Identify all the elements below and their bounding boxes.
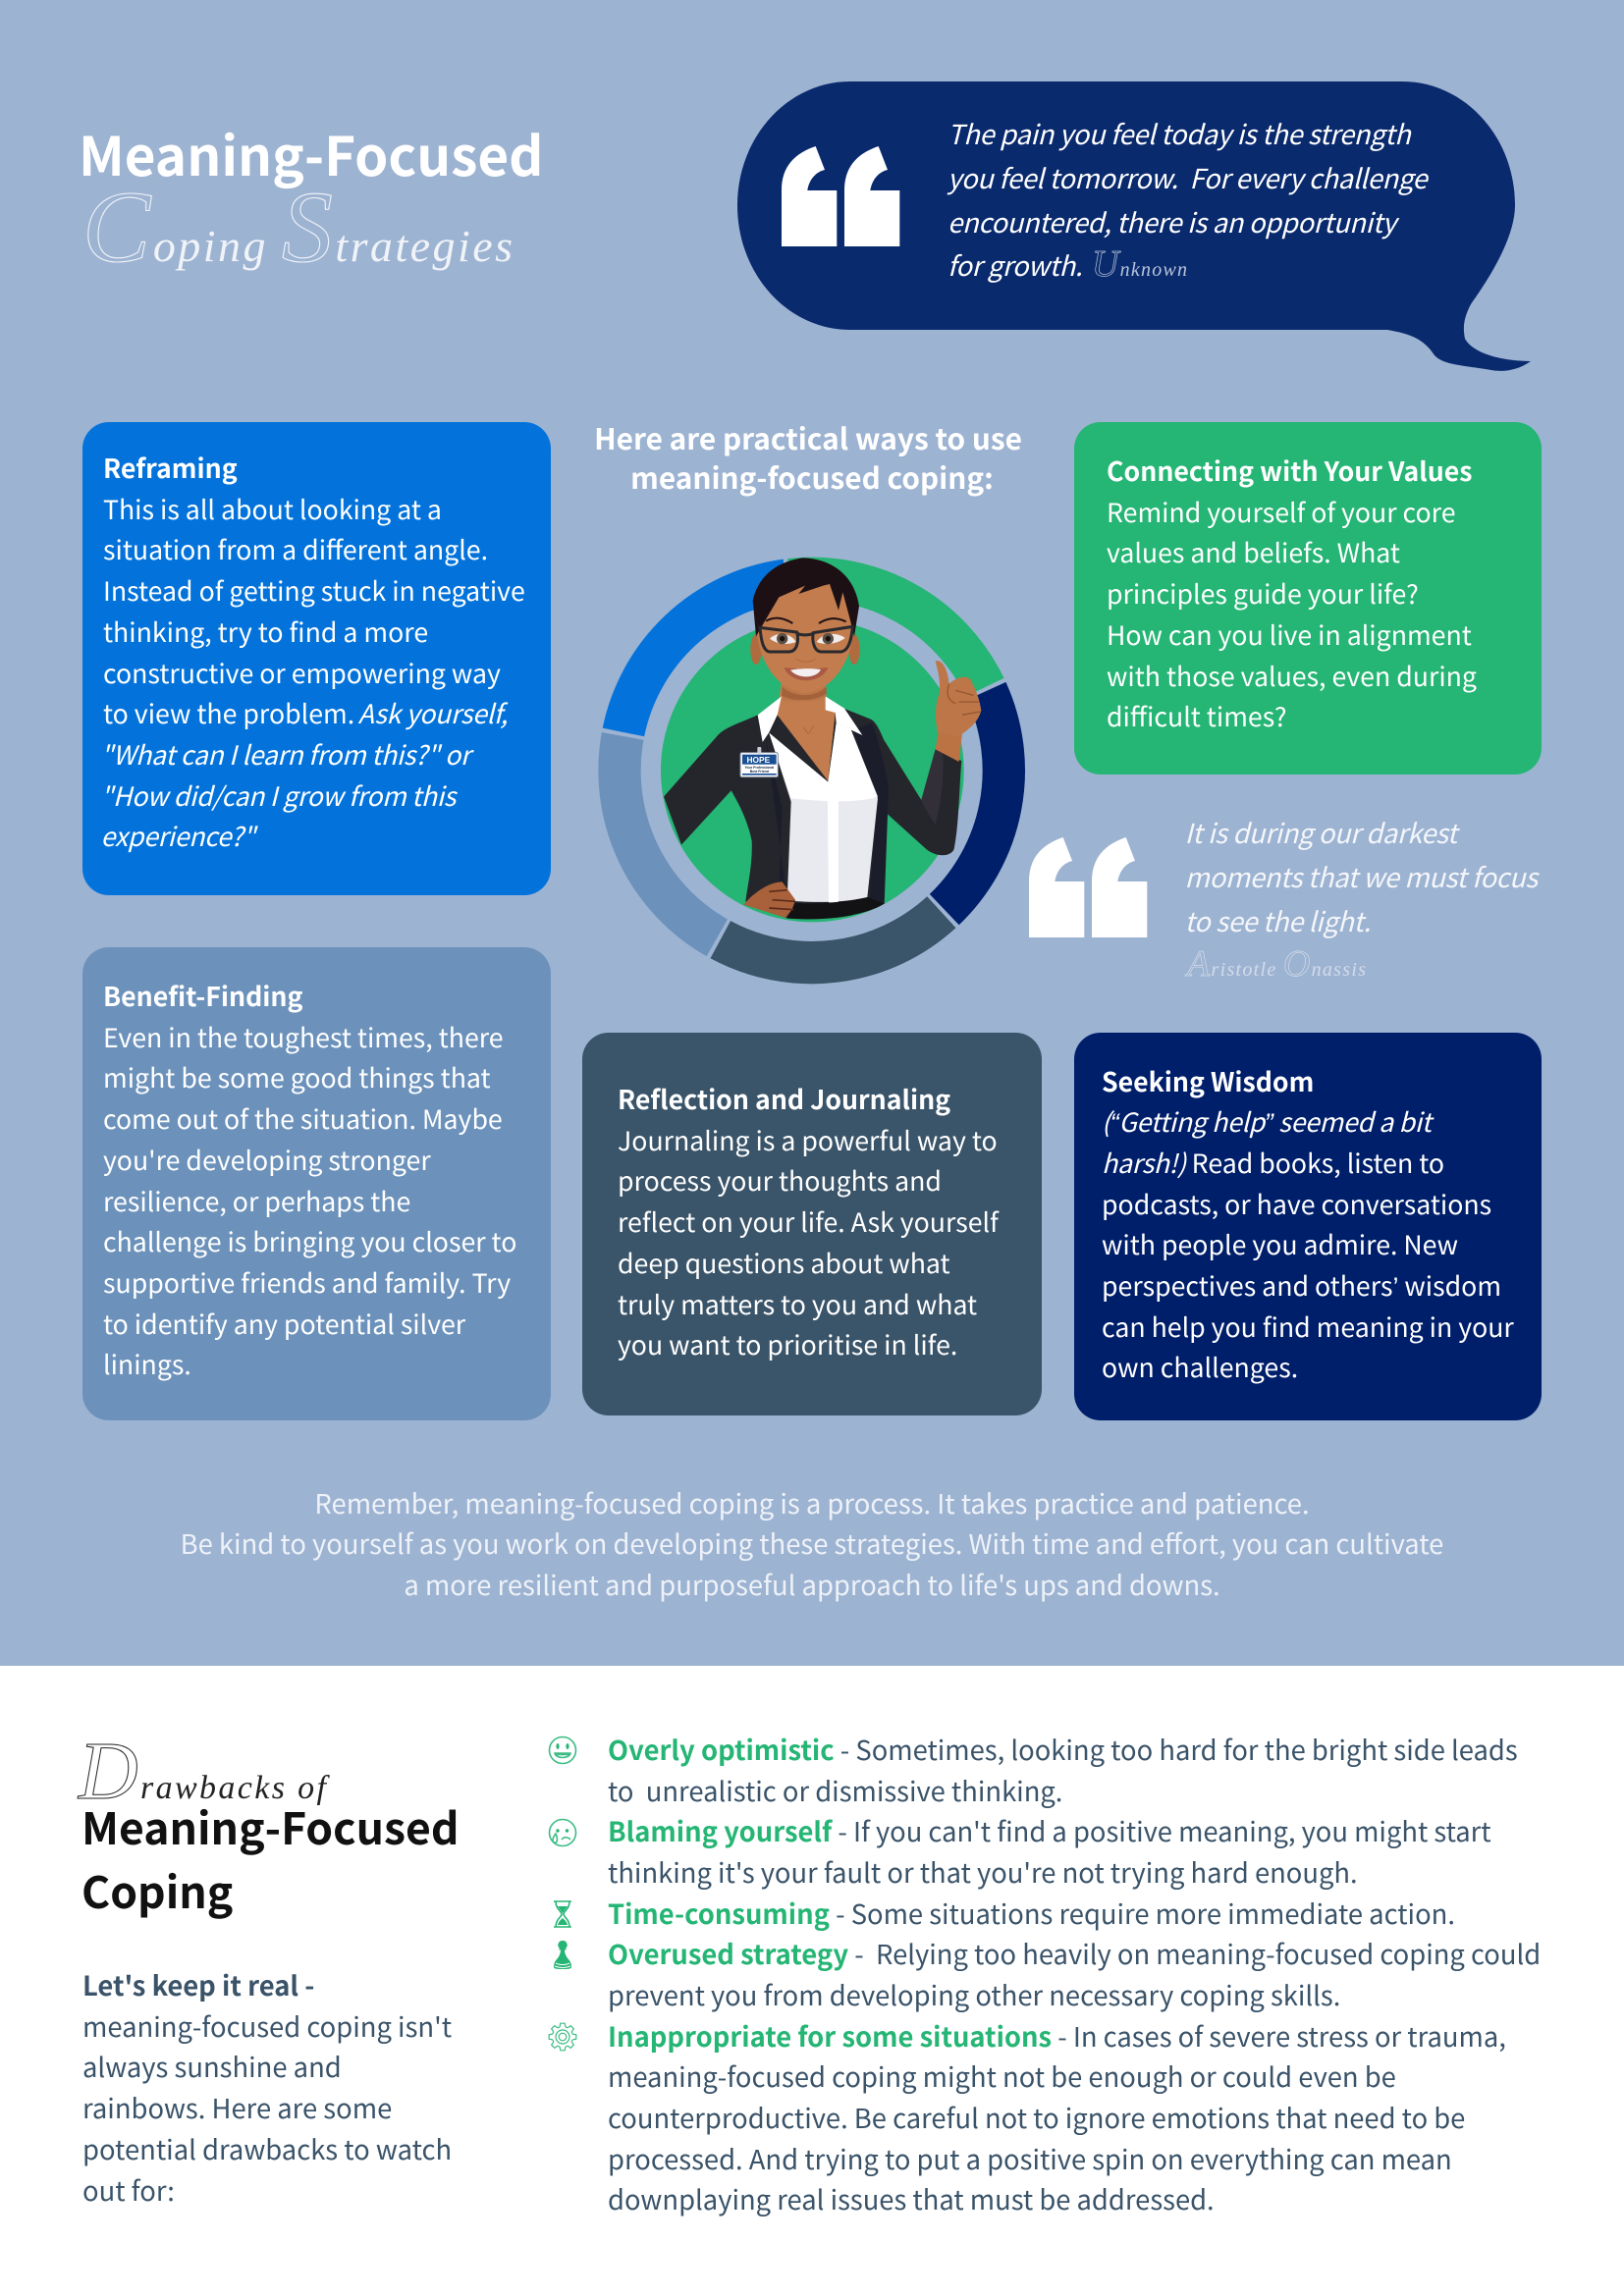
closing paragraph: a more resilient and purposeful approach to life's ups and downs. bbox=[404, 1564, 1220, 1603]
title line: Meaning-Focused: Meaning-Focused bbox=[79, 113, 543, 191]
quote text bbox=[947, 113, 1429, 284]
icon: crying face bbox=[548, 1818, 577, 1847]
benefit-finding text: supportive friends and family. Try bbox=[103, 1262, 511, 1301]
connecting text: Connecting with Your Values bbox=[1107, 451, 1472, 489]
benefit-finding text: might be some good things that bbox=[103, 1057, 491, 1095]
hair bbox=[753, 558, 859, 636]
icon: gear bbox=[548, 2022, 577, 2052]
reframing text: "How did/can I grow from this bbox=[100, 775, 456, 814]
character illustration bbox=[664, 558, 981, 919]
icon: hourglass bbox=[554, 1900, 571, 1928]
reframing text: thinking, try to find a more bbox=[103, 612, 428, 650]
attribution: Aristotle Onassis: Aristotle Onassis bbox=[1184, 943, 1366, 985]
drawbacks list: downplaying real issues that must be addressed. bbox=[608, 2178, 1215, 2217]
donut ring bbox=[540, 500, 1083, 1041]
inner green circle bbox=[661, 619, 964, 922]
intro text: rainbows. Here are some bbox=[82, 2087, 392, 2126]
drawbacks list: processed. And trying to put a positive spin on everything can mean bbox=[608, 2138, 1452, 2177]
connecting text: principles guide your life? bbox=[1107, 573, 1419, 612]
jacket bbox=[664, 709, 961, 919]
seeking wisdom text bbox=[1102, 1060, 1514, 1385]
seeking wisdom text: podcasts, or have conversations bbox=[1102, 1184, 1491, 1222]
panel: benefit-finding bbox=[82, 947, 551, 1420]
bubble shape bbox=[737, 81, 1531, 371]
intro text: always sunshine and bbox=[82, 2046, 342, 2085]
quote text: you feel tomorrow. For every challenge bbox=[947, 157, 1427, 196]
benefit-finding text: to identify any potential silver bbox=[103, 1304, 465, 1342]
connecting text: with those values, even during bbox=[1107, 656, 1477, 694]
connecting text: How can you live in alignment bbox=[1107, 614, 1472, 653]
reframing text bbox=[100, 448, 525, 854]
drawbacks list: Overused strategy - Relying too heavily on meaning-focused coping could bbox=[608, 1933, 1541, 1972]
lapel bbox=[852, 723, 889, 906]
benefit-finding text: linings. bbox=[103, 1344, 191, 1382]
seeking wisdom text: harsh!) Read books, listen to bbox=[1102, 1143, 1444, 1181]
reflection text: deep questions about what bbox=[618, 1243, 950, 1281]
script: Drawbacks of: Drawbacks of bbox=[78, 1726, 331, 1817]
nose bbox=[795, 658, 817, 662]
reflection text bbox=[618, 1079, 1000, 1362]
reframing text: to view the problem. Ask yourself, bbox=[103, 693, 508, 731]
raised forearm and hand bbox=[936, 726, 962, 762]
title script: Coping Strategies: Coping Strategies bbox=[82, 171, 513, 284]
title bbox=[79, 113, 543, 284]
benefit-finding text: Benefit-Finding bbox=[103, 976, 302, 1014]
reframing text: constructive or empowering way bbox=[103, 653, 501, 691]
reflection text: process your thoughts and bbox=[618, 1160, 942, 1199]
intro text: potential drawbacks to watch bbox=[82, 2128, 452, 2167]
name badge bbox=[740, 747, 778, 777]
icon: smile bbox=[548, 1735, 577, 1765]
seeking wisdom text: with people you admire. New bbox=[1102, 1224, 1458, 1262]
central heading bbox=[594, 414, 1022, 497]
connecting text bbox=[1107, 451, 1477, 734]
drawbacks list: Inappropriate for some situations - In cases of severe stress or trauma, bbox=[608, 2015, 1506, 2055]
heading: Meaning-Focused Coping bbox=[81, 1792, 459, 1920]
reflection text: Journaling is a powerful way to bbox=[618, 1120, 998, 1158]
reframing text: Reframing bbox=[103, 448, 238, 486]
blue background section bbox=[0, 0, 1624, 1666]
head bbox=[750, 558, 860, 702]
drawbacks list bbox=[608, 1729, 1541, 2217]
drawbacks heading bbox=[77, 1726, 459, 1920]
drawbacks list: Time-consuming - Some situations require more immediate action. bbox=[608, 1893, 1455, 1932]
drawbacks list: to unrealistic or dismissive thinking. bbox=[608, 1770, 1062, 1809]
reframing text: experience?" bbox=[100, 816, 255, 854]
closing paragraph: Be kind to yourself as you work on developing these strategies. With time and effort, you can cultivate bbox=[181, 1522, 1443, 1562]
second quote bbox=[1029, 812, 1540, 985]
benefit-finding text: you're developing stronger bbox=[103, 1140, 431, 1178]
hand on hip bbox=[743, 881, 795, 918]
intro text: Let's keep it real - bbox=[82, 1964, 314, 2003]
collar bbox=[758, 696, 782, 742]
panel: reflection and journaling bbox=[582, 1033, 1042, 1415]
quote text: It is during our darkest bbox=[1184, 812, 1457, 851]
benefit-finding text: challenge is bringing you closer to bbox=[103, 1221, 516, 1259]
connecting text: Remind yourself of your core bbox=[1107, 492, 1456, 530]
quote text: The pain you feel today is the strength bbox=[947, 113, 1410, 152]
mouth bbox=[784, 667, 828, 680]
seeking wisdom text: can help you find meaning in your bbox=[1102, 1307, 1514, 1345]
central heading: meaning-focused coping: bbox=[630, 454, 994, 497]
closing paragraph: Remember, meaning-focused coping is a process. It takes practice and patience. bbox=[314, 1482, 1310, 1522]
shirt bbox=[769, 723, 878, 902]
drawbacks list: counterproductive. Be careful not to ignore emotions that need to be bbox=[608, 2097, 1465, 2136]
seeking wisdom text: Seeking Wisdom bbox=[1102, 1060, 1314, 1099]
speech bubble quote bbox=[737, 81, 1531, 371]
central heading: Here are practical ways to use bbox=[594, 414, 1022, 457]
donut chart with character illustration bbox=[598, 558, 1025, 984]
seeking wisdom text: (“Getting help” seemed a bit bbox=[1102, 1101, 1432, 1140]
attribution: Unknown: Unknown bbox=[1092, 243, 1187, 285]
drawbacks list: thinking it's your fault or that you're not trying hard enough. bbox=[608, 1851, 1358, 1891]
heading: Meaning-Focused Coping: Coping bbox=[81, 1857, 233, 1920]
name badge: Best Friend bbox=[750, 770, 769, 774]
benefit-finding text: come out of the situation. Maybe bbox=[103, 1098, 503, 1137]
reflection text: reflect on your life. Ask yourself bbox=[618, 1201, 999, 1240]
benefit-finding text bbox=[103, 976, 516, 1382]
quote mark icon bbox=[1029, 837, 1147, 937]
reframing text: situation from a different angle. bbox=[103, 529, 488, 567]
heading: Meaning-Focused Coping: Meaning-Focused bbox=[81, 1792, 459, 1857]
reframing text: "What can I learn from this?" or bbox=[100, 734, 470, 773]
drawbacks list: meaning-focused coping might not be enough or could even be bbox=[608, 2056, 1396, 2095]
reframing text: This is all about looking at a bbox=[103, 489, 442, 527]
seeking wisdom text: perspectives and others’ wisdom bbox=[1102, 1265, 1501, 1304]
quote mark icon bbox=[782, 146, 899, 246]
panel: seeking wisdom bbox=[1074, 1033, 1542, 1420]
eyebrows bbox=[766, 618, 846, 623]
quote text bbox=[1184, 812, 1540, 939]
panel: reframing bbox=[82, 422, 551, 895]
name badge: HOPE bbox=[747, 755, 771, 765]
closing paragraph bbox=[181, 1482, 1443, 1603]
drawbacks list: prevent you from developing other necessary coping skills. bbox=[608, 1974, 1340, 2013]
skin chest and neck bbox=[778, 677, 836, 781]
glasses bbox=[760, 626, 852, 652]
seeking wisdom text: own challenges. bbox=[1102, 1347, 1298, 1385]
connecting text: difficult times? bbox=[1107, 696, 1287, 734]
quote text: to see the light. bbox=[1184, 900, 1371, 939]
drawbacks list: Blaming yourself - If you can't find a positive meaning, you might start bbox=[608, 1810, 1491, 1849]
intro text: out for: bbox=[82, 2169, 175, 2209]
reflection text: truly matters to you and what bbox=[618, 1284, 977, 1322]
eyes bbox=[770, 634, 796, 644]
benefit-finding text: resilience, or perhaps the bbox=[103, 1181, 410, 1219]
intro text bbox=[82, 1964, 452, 2209]
reframing text: Instead of getting stuck in negative bbox=[103, 570, 525, 609]
drawbacks list: Overly optimistic - Sometimes, looking too hard for the bright side leads bbox=[608, 1729, 1518, 1768]
reflection text: Reflection and Journaling bbox=[618, 1079, 950, 1117]
quote text: moments that we must focus bbox=[1184, 856, 1538, 895]
quote text: encountered, there is an opportunity bbox=[947, 201, 1396, 240]
reflection text: you want to prioritise in life. bbox=[618, 1324, 957, 1362]
icon: chess pawn bbox=[554, 1941, 571, 1969]
skirt waist bbox=[787, 897, 885, 919]
benefit-finding text: Even in the toughest times, there bbox=[103, 1017, 504, 1055]
intro text: meaning-focused coping isn't bbox=[82, 2005, 452, 2045]
quote text: for growth. bbox=[947, 244, 1082, 284]
name badge: Your Professional bbox=[744, 766, 774, 770]
panel: connecting with your values bbox=[1074, 422, 1542, 774]
connecting text: values and beliefs. What bbox=[1107, 532, 1400, 570]
